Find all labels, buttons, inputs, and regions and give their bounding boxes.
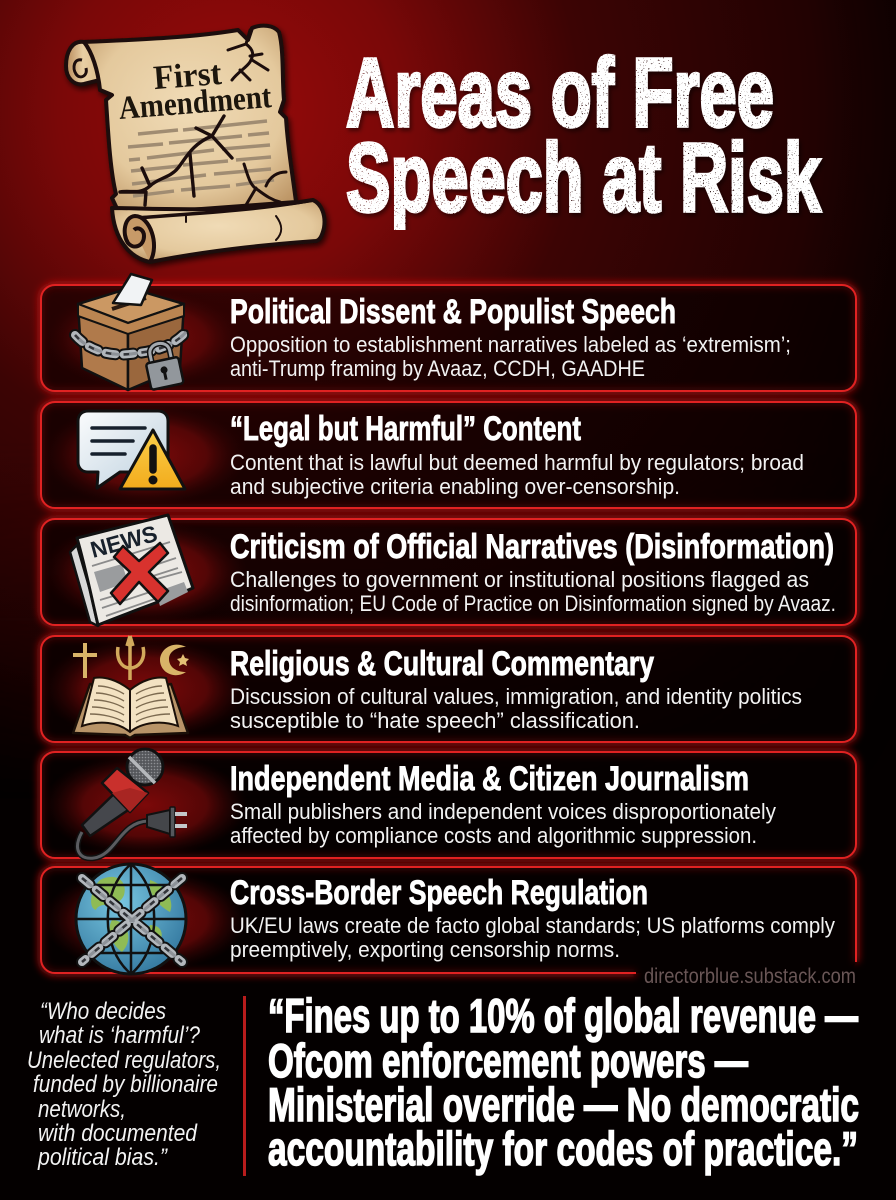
panel: "Legal but Harmful" Content [41, 402, 856, 508]
icon: newspaper with red X [70, 515, 193, 626]
panel frame [41, 285, 856, 391]
icon: globe wrapped in chains [76, 864, 186, 974]
ballot paper [113, 274, 152, 305]
left quote: political bias.” [37, 1144, 168, 1171]
panel description: Discussion of cultural values, immigration, and identity politics [230, 684, 802, 709]
left quote: with documented [38, 1120, 198, 1147]
open book [73, 684, 188, 738]
panel heading: Independent Media & Citizen Journalism [230, 760, 749, 798]
icon: religious symbols over open book [73, 636, 189, 738]
cracks [228, 30, 268, 80]
meridians and parallels [76, 864, 186, 974]
panel frame [41, 519, 856, 625]
parchment sheet [84, 26, 296, 215]
icon: speech bubble with warning triangle [78, 411, 185, 489]
panel frame [41, 402, 856, 508]
left quote: networks, [38, 1096, 126, 1123]
panel description [230, 567, 836, 616]
main quote [268, 989, 859, 1175]
panel description [230, 913, 836, 962]
icon: unplugged microphone [78, 749, 187, 858]
left quote: “Who decides [40, 998, 166, 1025]
panel description: preemptively, exporting censorship norms. [230, 937, 620, 962]
panel frame [41, 867, 856, 973]
panel description [230, 684, 802, 733]
panel description: Opposition to establishment narratives labeled as ‘extremism’; [230, 332, 791, 357]
panel description: Small publishers and independent voices disproportionately [230, 799, 777, 824]
watermark: directorblue.substack.com [644, 965, 856, 988]
left quote: funded by billionaire [33, 1071, 218, 1098]
mic body [102, 768, 148, 812]
left quote [27, 998, 221, 1171]
red X mark [111, 543, 168, 604]
panel: Religious & Cultural Commentary [41, 636, 856, 742]
crossed chains [82, 878, 182, 962]
panel frame [41, 752, 856, 858]
icon: chained ballot box [75, 274, 186, 390]
panel description: susceptible to “hate speech” classification. [230, 708, 640, 733]
panel description [230, 799, 777, 848]
trident [118, 636, 144, 680]
panel description [230, 332, 791, 381]
heading on scroll [115, 51, 273, 127]
crescent and star [160, 645, 186, 675]
mic head [127, 749, 163, 785]
left quote: what is ‘harmful’? [39, 1022, 201, 1049]
panel heading: Religious & Cultural Commentary [230, 645, 654, 683]
background [0, 0, 896, 724]
writing lines [128, 121, 274, 196]
handle [82, 790, 134, 836]
padlock [142, 340, 184, 390]
panel description: Content that is lawful but deemed harmful by regulators; broad [230, 450, 804, 475]
panel: Criticism of Official Narratives [41, 519, 856, 625]
chain [75, 332, 186, 354]
panel: Political Dissent & Populist Speech [41, 285, 856, 391]
cable [78, 821, 148, 858]
cross [73, 643, 97, 678]
panel description [230, 450, 804, 499]
panel heading: “Legal but Harmful” Content [230, 410, 581, 448]
lower scroll roll [112, 200, 325, 262]
panel description: anti-Trump framing by Avaaz, CCDH, GAADHE [230, 356, 645, 381]
landmasses [91, 877, 171, 952]
panel heading: Political Dissent & Populist Speech [230, 293, 676, 331]
icon: cracked First Amendment scroll [66, 26, 325, 262]
left scroll roll [66, 42, 100, 84]
title [346, 38, 822, 232]
panel description: and subjective criteria enabling over-censorship. [230, 474, 680, 499]
newspaper masthead: NEWS [88, 520, 160, 563]
plug [147, 810, 170, 834]
panel description: Challenges to government or institutional positions flagged as [230, 567, 809, 592]
left quote: Unelected regulators, [27, 1047, 221, 1074]
panel frame [41, 636, 856, 742]
heading on scroll: First [152, 55, 223, 97]
panel heading: Cross-Border Speech Regulation [230, 874, 648, 912]
heading on scroll: Amendment [117, 79, 273, 127]
panel description: UK/EU laws create de facto global standards; US platforms comply [230, 913, 836, 938]
panel: Cross-Border Speech Regulation [41, 867, 856, 973]
panel description: affected by compliance costs and algorithmic suppression. [230, 823, 757, 848]
panel: Independent Media & Citizen Journalism [41, 752, 856, 858]
